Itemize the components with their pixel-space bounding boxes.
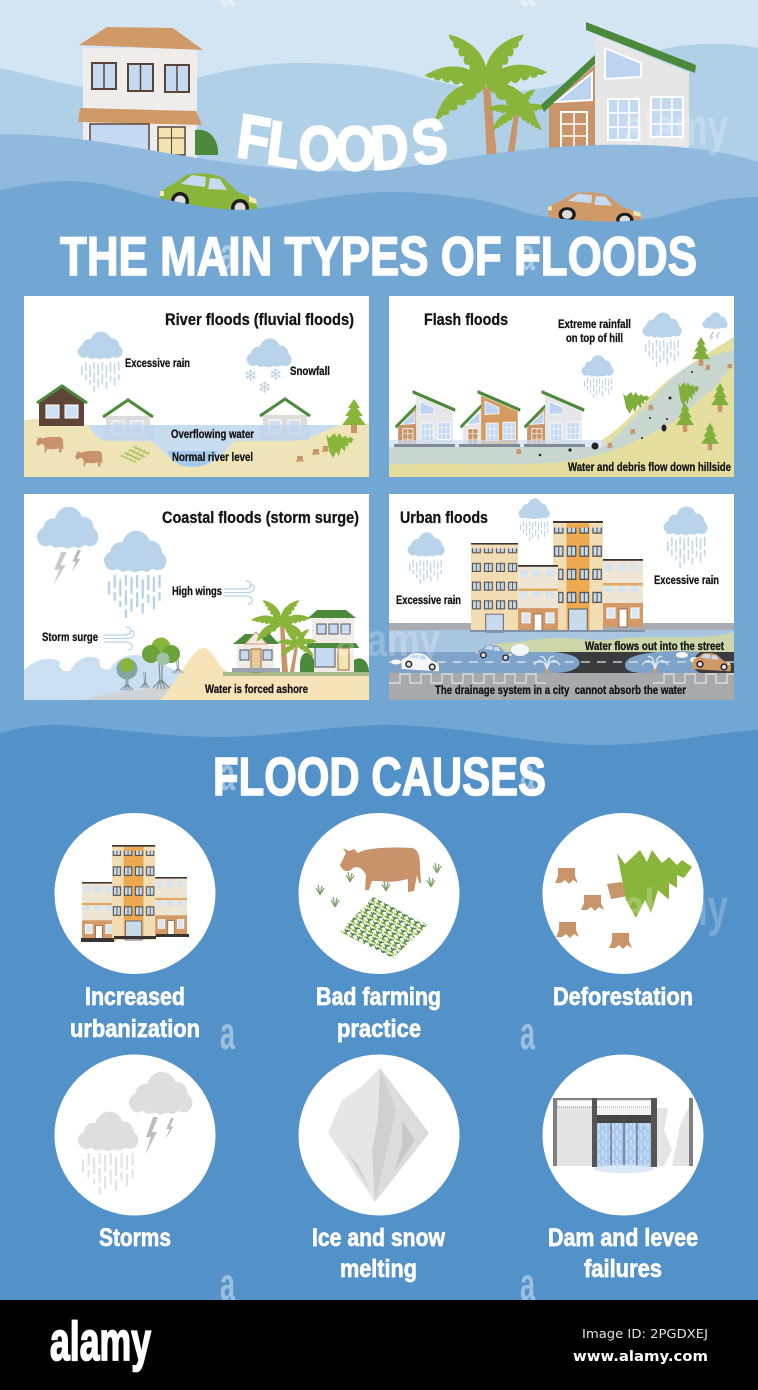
label: excessive rain left: Excessive rain: [396, 595, 461, 607]
crop field: [120, 445, 152, 463]
causes background wave: [0, 725, 758, 1300]
panel title: River floods (fluvial floods): [165, 311, 354, 329]
caption: [548, 1224, 698, 1283]
trees and stumps: [296, 399, 366, 462]
icon: iceberg: [328, 1068, 429, 1202]
watermarks: a: [220, 1007, 235, 1059]
caption: Ice and snow: [312, 1224, 445, 1252]
panel title: Flash floods: [424, 311, 508, 329]
cloud with snow: ❄: [269, 365, 282, 384]
icon: cow: [340, 847, 421, 892]
panel: coastal floods: [24, 494, 369, 700]
clouds and lightning: [37, 507, 166, 618]
title: FLOODS: FLOODS: [233, 101, 451, 185]
website: www.alamy.com: [573, 1349, 708, 1365]
label: high wings: High wings: [172, 586, 222, 598]
label: extreme rainfall: Extreme rainfall: [558, 319, 631, 331]
label: normal river level: Normal river level: [172, 452, 253, 464]
cause: storms: [54, 1054, 216, 1252]
house: left two-storey: [78, 27, 218, 158]
label: overflowing water: Overflowing water: [171, 429, 254, 441]
icon: buildings: [81, 845, 189, 942]
label: water forced ashore: Water is forced ashore: [205, 684, 308, 696]
panel title: Urban floods: [400, 509, 488, 527]
drainage ground: [389, 673, 734, 700]
fir trees: [623, 337, 729, 450]
grass: [475, 632, 734, 652]
watermarks: a: [520, 1007, 535, 1059]
curb and flood band: [389, 623, 734, 630]
car: green: [160, 173, 258, 219]
clouds and rain: [407, 498, 708, 584]
label: drainage system: The drainage system in a city cannot absorb the water: [435, 685, 686, 697]
icon: grass tufts: [316, 863, 441, 907]
watermarks: [220, 0, 728, 1310]
caption: Deforestation: [553, 983, 693, 1011]
clouds and rain: [581, 312, 728, 398]
label: water flows: Water flows out into the street: [585, 641, 724, 653]
watermarks: a: [520, 748, 535, 800]
label: extreme rainfall: [558, 319, 631, 345]
watermarks: a: [520, 1258, 535, 1310]
caption: failures: [584, 1255, 662, 1283]
icon: wind surge: [104, 627, 134, 650]
coastal palms: [251, 596, 317, 672]
house: right modern: [541, 22, 696, 148]
hillside: [389, 337, 734, 477]
panel title: Coastal floods (storm surge): [162, 509, 359, 527]
caption: Increased: [85, 983, 185, 1011]
label: excessive rain right: Excessive rain: [654, 575, 719, 587]
caption: Storms: [99, 1224, 171, 1252]
road flooding: [389, 651, 700, 673]
panel: river floods: [24, 296, 369, 477]
label: storm surge: Storm surge: [42, 632, 98, 644]
cause: bad farming practice: [298, 813, 460, 1043]
shoreline: [86, 685, 172, 700]
caption: Bad farming: [316, 983, 441, 1011]
cause: increased urbanization: [54, 813, 216, 1043]
road: [551, 652, 734, 673]
image id: Image ID: 2PGDXEJ: [582, 1326, 708, 1341]
house: coastal left: [232, 632, 280, 672]
cause: deforestation: [542, 813, 704, 1011]
debris water flow: [389, 350, 734, 465]
caption: Dam and levee: [548, 1224, 698, 1252]
watermarks: a: [220, 228, 235, 280]
three houses: [389, 390, 605, 447]
watermarks: a: [520, 228, 535, 280]
footer logo: alamy: [50, 1310, 151, 1372]
coastal base: [223, 672, 369, 676]
heading: flood causes: FLOOD CAUSES: [213, 747, 546, 807]
debris: [516, 364, 733, 456]
house: flooded left: [103, 400, 153, 440]
sea waves: [24, 655, 180, 700]
watermarks: alamy: [336, 614, 440, 666]
foam: [391, 644, 700, 664]
drainage pipes: [389, 674, 737, 683]
caption: practice: [337, 1015, 421, 1043]
house: flooded right: [260, 399, 310, 439]
car: orange: [548, 192, 642, 229]
caption: urbanization: [70, 1015, 200, 1043]
watermarks: a: [220, 1258, 235, 1310]
label: water and debris: Water and debris flow down hillside: [568, 462, 731, 474]
footer bar: [0, 1300, 758, 1390]
panel: flash floods: [389, 296, 734, 477]
cloud with snow: ❄: [258, 378, 271, 397]
icon: stumps and fallen tree: [555, 850, 692, 949]
icon: storm clouds: [78, 1072, 192, 1195]
cows: [36, 437, 103, 467]
label: excessive rain: Excessive rain: [125, 358, 190, 370]
panel: urban floods: [389, 494, 737, 700]
caption: [312, 1224, 445, 1283]
label: snowfall: Snowfall: [290, 366, 330, 378]
header scene: [0, 0, 758, 240]
buildings: [470, 521, 645, 632]
river ground and water: [24, 419, 369, 477]
cloud with snow: ❄: [244, 366, 257, 385]
mangrove trees: [116, 638, 184, 691]
cause: dam and levee failures: [542, 1054, 704, 1283]
icon: crop field: [340, 897, 428, 958]
cloud with rain: [77, 331, 123, 392]
cause: ice and snow melting: [298, 1054, 460, 1283]
cloud with snow: [244, 338, 292, 397]
icon: wind high: [224, 581, 254, 604]
fountains: [534, 656, 668, 673]
caption: melting: [340, 1255, 417, 1283]
caption: [70, 983, 200, 1043]
cars: [401, 645, 731, 671]
caption: [316, 983, 441, 1043]
floodwater over houses: [103, 425, 310, 440]
watermarks: a: [220, 748, 235, 800]
sand: [160, 648, 369, 700]
house: coastal right: [300, 610, 369, 672]
label: extreme rainfall: on top of hill: [566, 333, 623, 345]
palm trees: [424, 27, 548, 158]
house: brown: [37, 386, 87, 426]
icon: dam: [553, 1098, 693, 1173]
